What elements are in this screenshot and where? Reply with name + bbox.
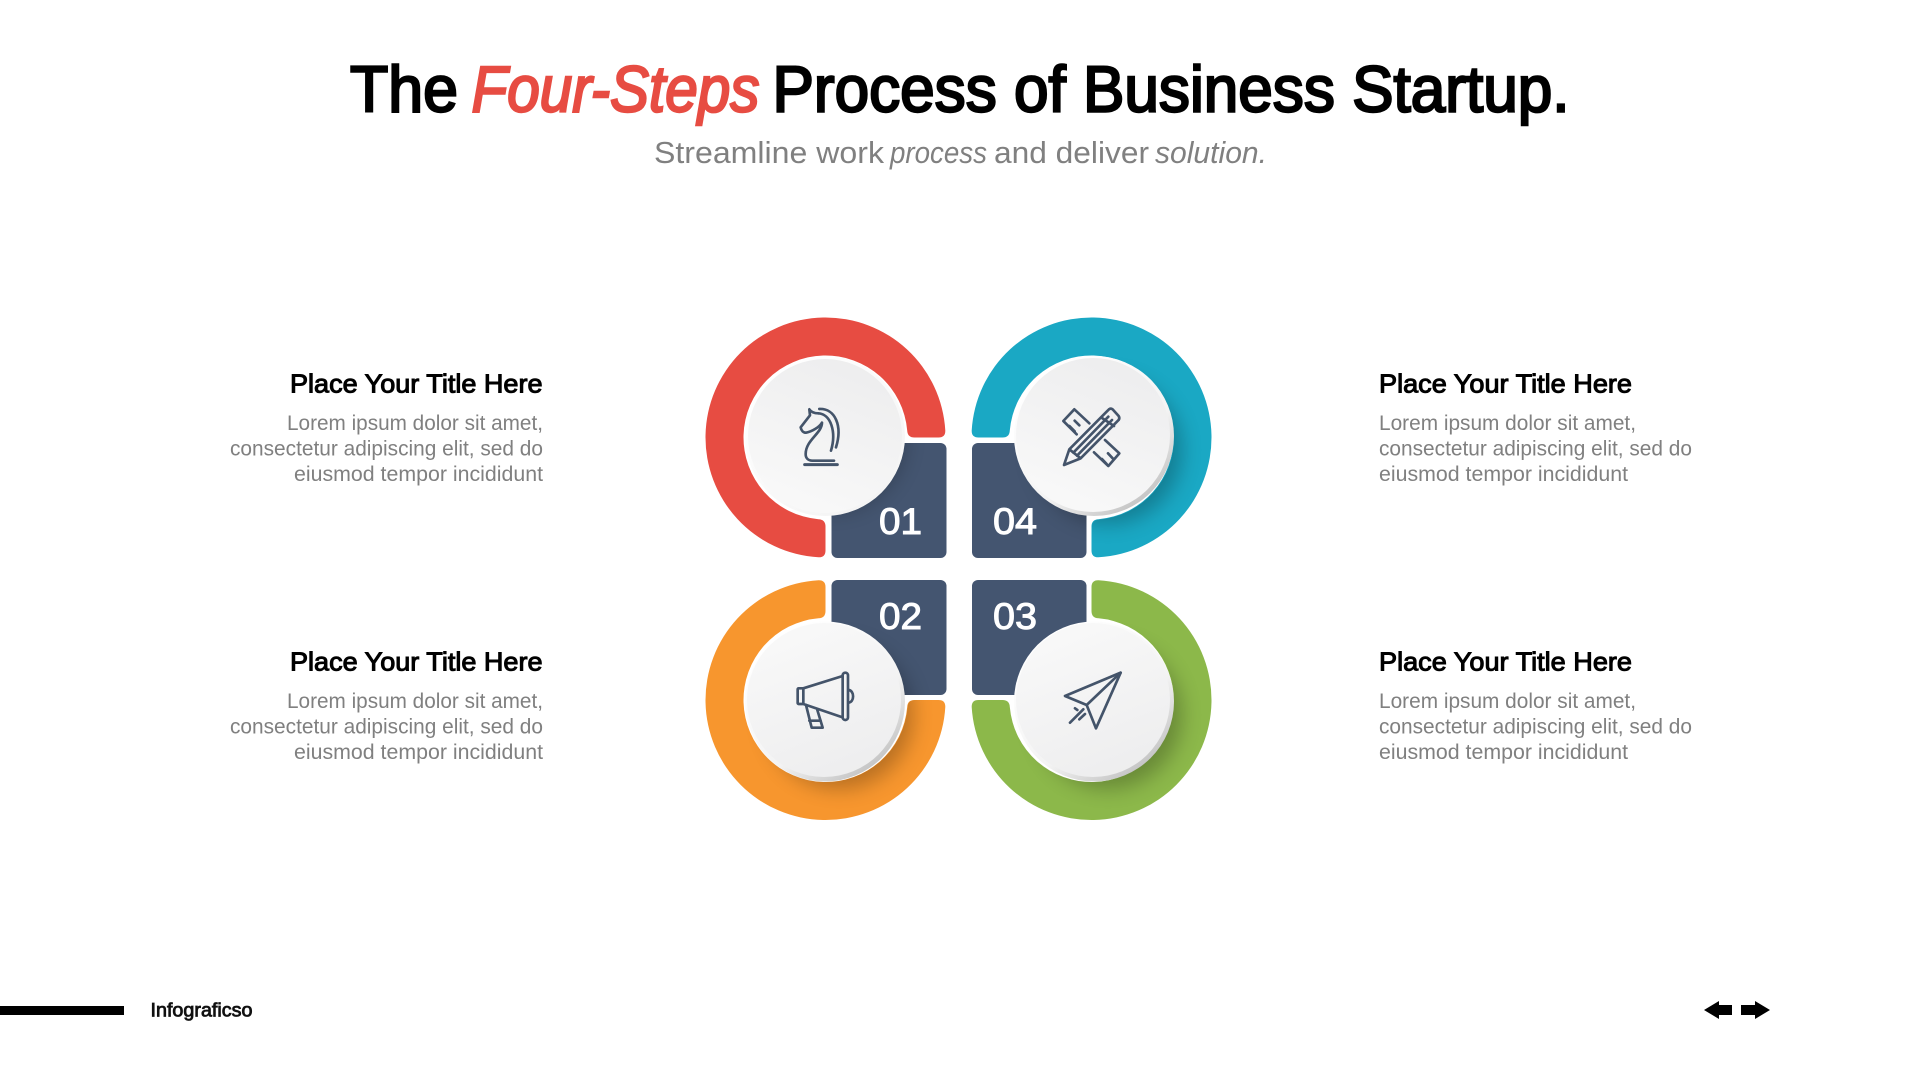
text block: step 4: eiusmod tempor incididunt (1379, 463, 1628, 486)
icon: megaphone (798, 673, 853, 728)
step 03: green ring: 03 (993, 596, 1037, 637)
footer bar (0, 1006, 124, 1015)
text block: step 4: consectetur adipiscing elit, sed do (1379, 438, 1692, 460)
text block: step 1: consectetur adipiscing elit, sed do (230, 438, 543, 460)
step 01: red ring: 01 (879, 501, 922, 542)
step 04: blue ring (972, 318, 1211, 558)
text block: step 2: consectetur adipiscing elit, sed do (230, 716, 543, 738)
text block: step 1 (230, 368, 543, 486)
text block: step 3 (1379, 646, 1692, 764)
step 02: orange ring: 02 (879, 596, 922, 637)
text block: step 4: Place Your Title Here (1379, 368, 1632, 398)
icon: pencil and ruler (1063, 409, 1119, 466)
icon: paper plane (1065, 673, 1121, 728)
text block: step 2 (230, 646, 543, 764)
footer label: Infograficso (150, 1000, 252, 1022)
subtitle: solution. (1155, 135, 1267, 170)
icon: chess knight (801, 409, 838, 465)
text block: step 2: Place Your Title Here (290, 646, 542, 676)
text block: step 2: Lorem ipsum dolor sit amet, (287, 690, 543, 713)
title: Four-Steps (472, 52, 760, 126)
title: Process of Business Startup. (772, 52, 1570, 126)
step 03: green ring (972, 580, 1211, 820)
text block: step 4 (1379, 368, 1692, 486)
step 01: red ring (706, 318, 946, 558)
text block: step 3: Place Your Title Here (1379, 646, 1632, 676)
step 04: blue ring: 04 (993, 501, 1037, 542)
text block: step 4: Lorem ipsum dolor sit amet, (1379, 412, 1636, 435)
text block: step 1: Lorem ipsum dolor sit amet, (287, 412, 543, 435)
arrow: next (1741, 1001, 1770, 1019)
text block: step 3: eiusmod tempor incididunt (1379, 741, 1628, 764)
subtitle: Streamline work (654, 135, 885, 170)
arrow: previous (1704, 1001, 1732, 1019)
text block: step 3: consectetur adipiscing elit, sed do (1379, 716, 1692, 738)
text block: step 2: eiusmod tempor incididunt (294, 741, 543, 764)
text block: step 1: eiusmod tempor incididunt (294, 463, 543, 486)
title: The (350, 52, 458, 126)
text block: step 3: Lorem ipsum dolor sit amet, (1379, 690, 1636, 713)
subtitle: and deliver (994, 135, 1149, 170)
subtitle (654, 135, 1267, 170)
text block: step 1: Place Your Title Here (290, 368, 542, 398)
subtitle: process (889, 135, 987, 170)
step 02: orange ring (706, 580, 946, 820)
title (350, 52, 1570, 126)
